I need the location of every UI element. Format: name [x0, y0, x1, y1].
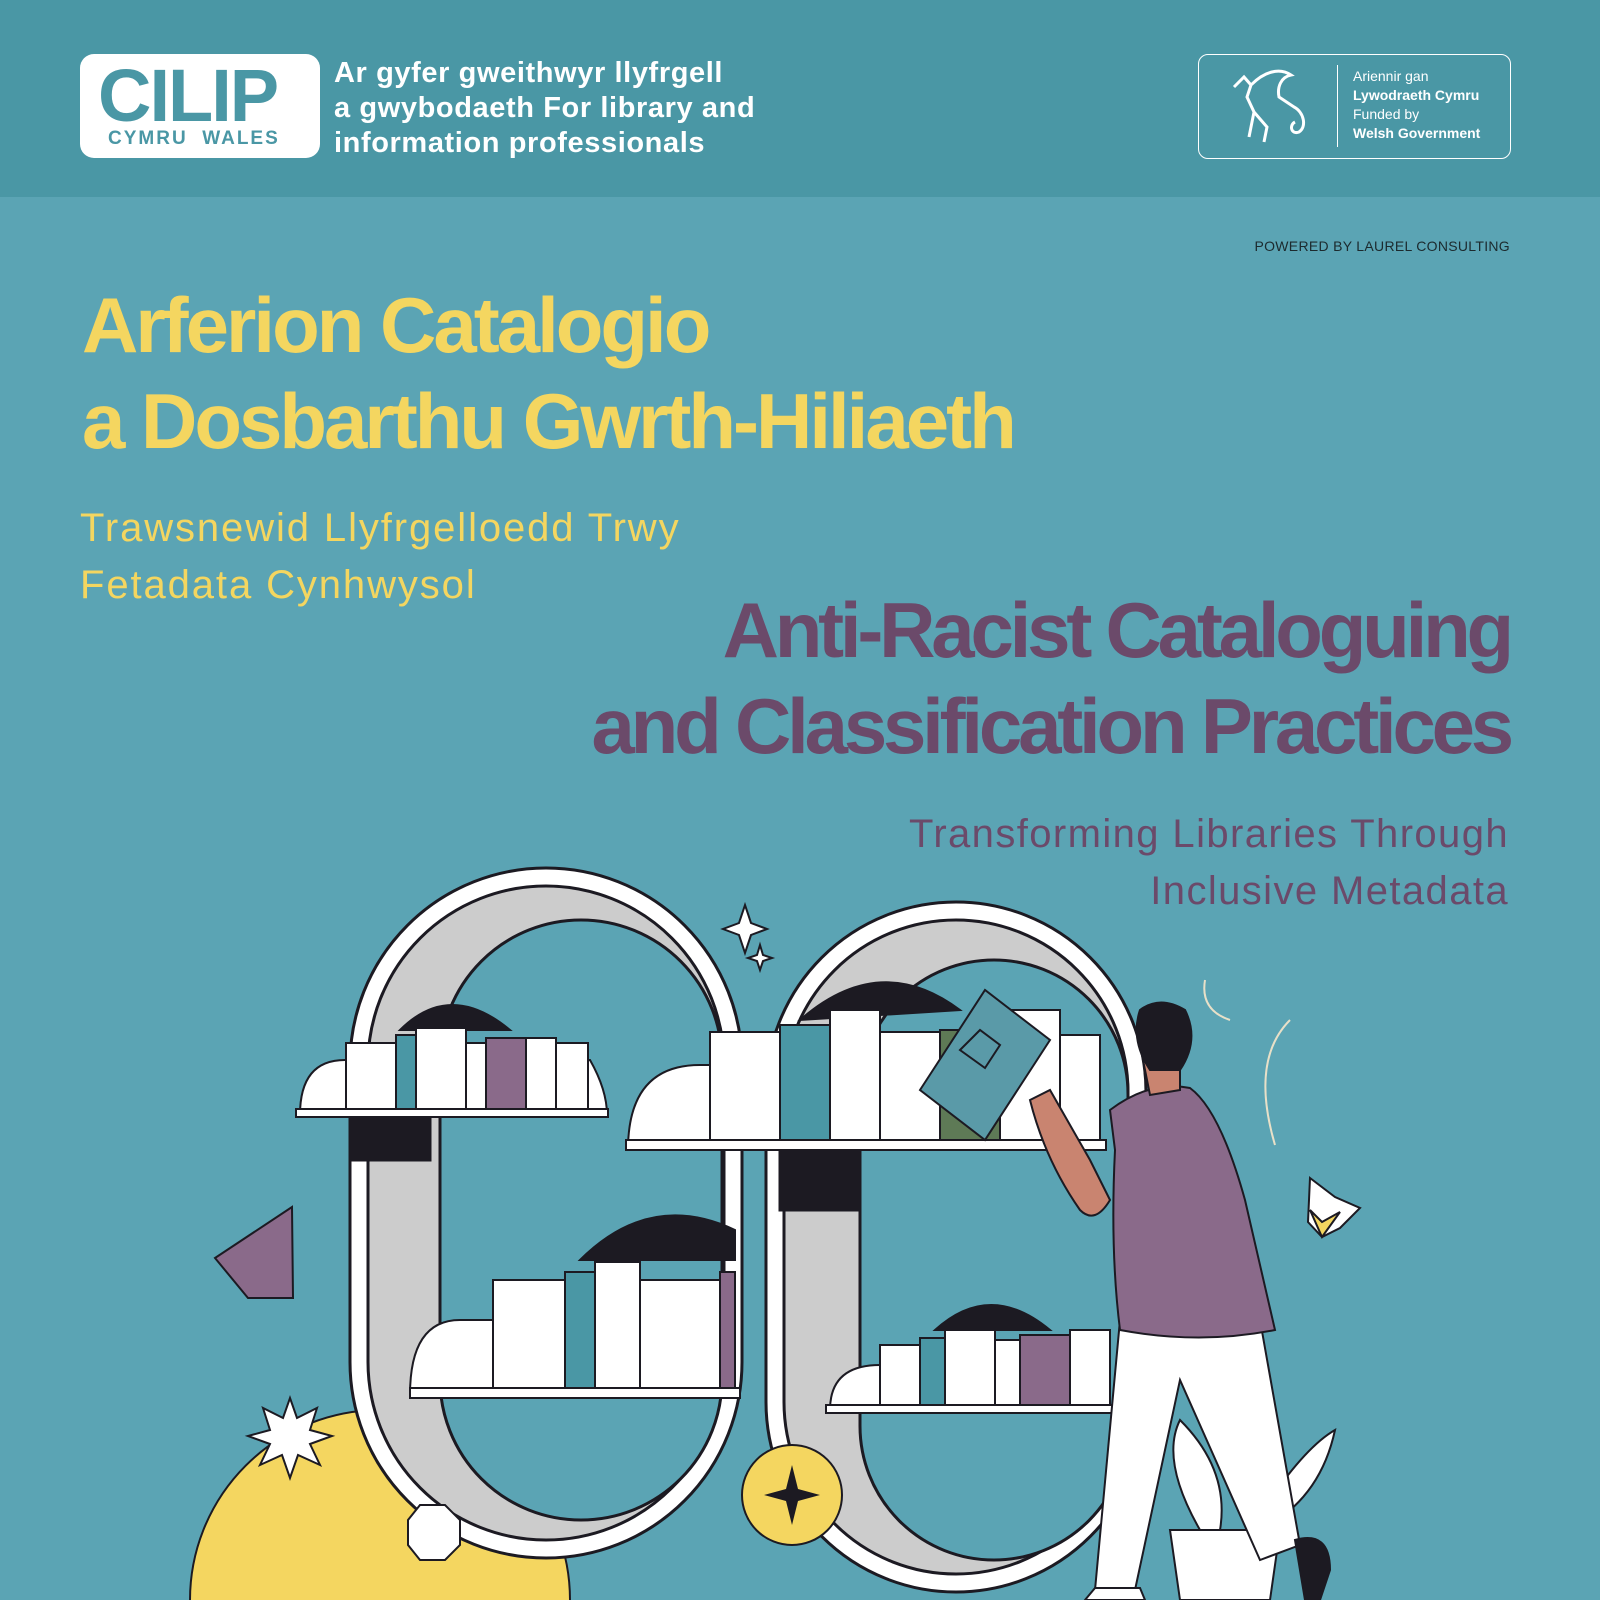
Welsh Government logo: Ariennir gan [1353, 68, 1428, 84]
Welsh Government logo: Welsh Government [1353, 125, 1480, 141]
left loop [350, 868, 742, 1558]
Welsh Government logo [1198, 54, 1511, 159]
swirls [1204, 980, 1290, 1145]
shelf top-right [626, 982, 1106, 1150]
yellow circle [190, 1410, 570, 1600]
Welsh subtitle [80, 506, 680, 607]
Welsh subtitle: Fetadata Cynhwysol [80, 563, 477, 607]
Welsh title [82, 281, 1014, 465]
header tagline: Ar gyfer gweithwyr llyfrgell [334, 57, 723, 89]
Welsh subtitle: Trawsnewid Llyfrgelloedd Trwy [80, 506, 680, 550]
Welsh Government logo: Funded by [1353, 106, 1419, 122]
English title [592, 586, 1511, 770]
header band [0, 0, 1600, 197]
header tagline: information professionals [334, 127, 705, 159]
CILIP logo [80, 54, 320, 158]
English subtitle: Transforming Libraries Through [909, 812, 1509, 856]
powered by: POWERED BY LAUREL CONSULTING [1254, 238, 1510, 254]
shelf bottom-right [826, 1305, 1116, 1413]
right loop [766, 902, 1146, 1592]
starburst [248, 1398, 332, 1478]
header tagline [334, 57, 755, 159]
person [920, 990, 1330, 1600]
English subtitle [909, 812, 1509, 913]
English subtitle: Inclusive Metadata [1150, 869, 1509, 913]
Welsh Government logo: Lywodraeth Cymru [1353, 87, 1479, 103]
octagon [408, 1505, 460, 1560]
shelf top-left [296, 1005, 608, 1117]
icon: dragon [1233, 70, 1306, 142]
yellow star coin [742, 1445, 842, 1545]
sparkles [723, 905, 772, 970]
pyramid [215, 1207, 293, 1298]
plant pot [1170, 1530, 1280, 1600]
English title: and Classification Practices [592, 682, 1510, 770]
header tagline: a gwybodaeth For library and [334, 92, 755, 124]
illustration: library shelves and person [189, 866, 1362, 1600]
shelf bottom-left [410, 1215, 740, 1398]
cube [1308, 1178, 1360, 1237]
CILIP logo: CYMRU WALES [108, 128, 280, 149]
Welsh title: Arferion Catalogio [82, 281, 708, 369]
CILIP logo: CILIP [98, 54, 277, 137]
Welsh title: a Dosbarthu Gwrth-Hiliaeth [82, 377, 1014, 465]
English title: Anti-Racist Cataloguing [723, 586, 1510, 674]
